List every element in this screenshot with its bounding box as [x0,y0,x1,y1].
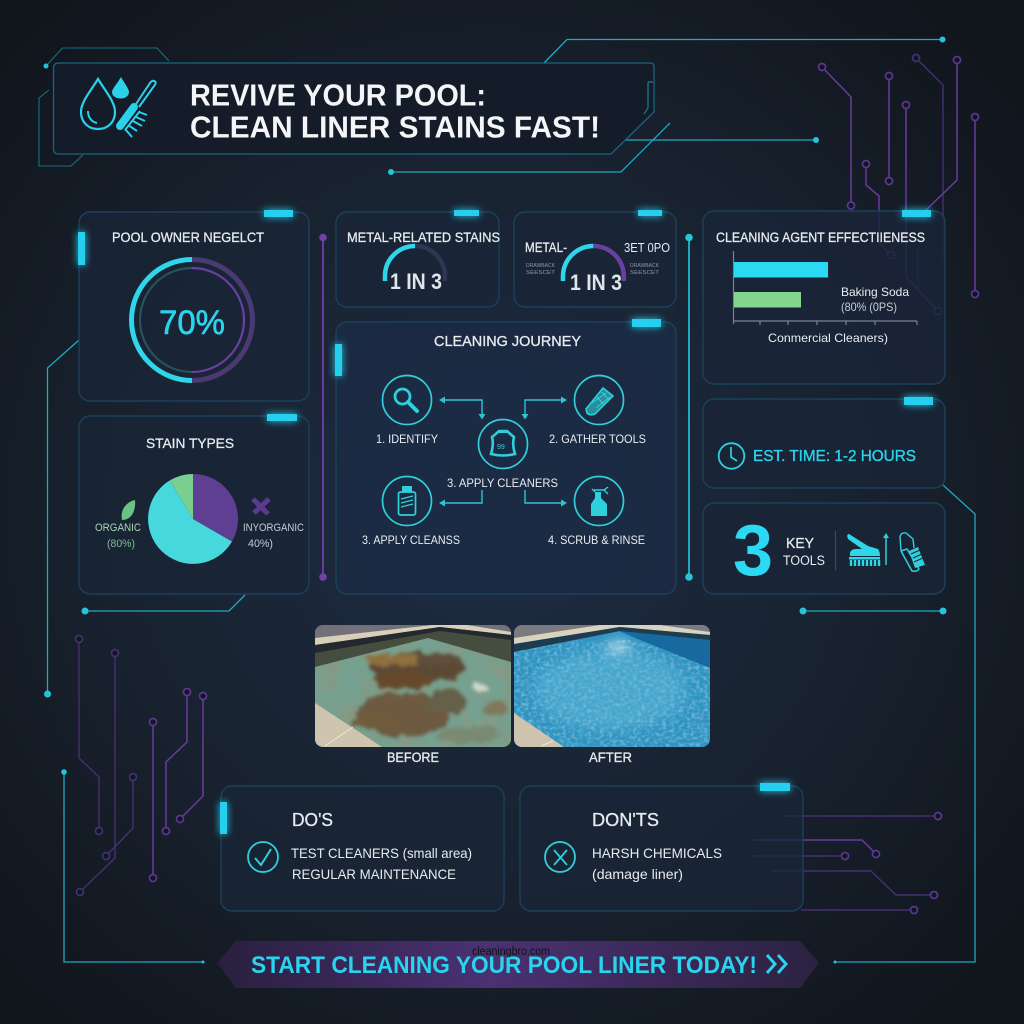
icon: check [248,842,278,872]
arrow: 1 to center [439,396,486,420]
panel: metal stat 2 [514,210,676,307]
step 1: identify [376,376,438,446]
label: organic [95,522,141,550]
heading: CLEANING AGENT EFFECTIIENESS [716,230,925,245]
small caption right: SEESCET [630,270,660,276]
watermark: cleaningbro.com [472,946,550,958]
label right: 3ET 0PO [624,240,670,255]
title: REVIVE YOUR POOL: [190,78,486,112]
circuit traces: purple lower left [76,636,206,896]
list [291,845,472,882]
panel: do's [220,786,504,911]
bar chart: Baking Soda [841,285,909,299]
heading: pool owner neglect: POOL OWNER NEGELCT [112,229,264,245]
label: inorganic: 40%) [248,538,273,550]
small caption right: DRAWBACK [630,263,659,269]
list [592,845,722,882]
heading: stain types: STAIN TYPES [146,435,234,451]
bar chart: Conmercial Cleaners) [768,331,888,345]
text: time: EST. TIME: 1-2 HOURS [753,448,916,465]
label: key tools: KEY [786,535,814,552]
chart: pie [148,474,238,564]
header banner [54,63,654,154]
label: organic: (80%) [107,538,135,550]
label: key tools: TOOLS [783,553,825,568]
label: inorganic [243,522,304,550]
small caption left: DRAWBACK [526,263,555,269]
photo: after [514,625,710,747]
step 3b: apply cleanss: 3. APPLY CLEANSS [362,533,460,547]
icon: arrow up [883,533,889,565]
circuit traces: purple lower right [748,812,942,914]
gauge: 1 IN 3 [570,270,622,295]
arrow: center to 4 [525,490,567,506]
panel: stain types [79,414,309,594]
bar chart [733,251,917,345]
list: REGULAR MAINTENANCE [292,866,456,882]
list: HARSH CHEMICALS [592,845,722,861]
small caption right [630,263,660,276]
call to action banner [217,941,819,988]
heading: METAL-RELATED STAINS [347,229,500,245]
call to action banner: START CLEANING YOUR POOL LINER TODAY! [251,952,757,979]
label: after: AFTER [589,750,632,765]
circuit traces: purple top right [818,54,978,314]
small caption left [526,263,556,276]
gauge [563,246,624,295]
step 4: scrub and rinse [548,476,645,547]
heading: CLEANING JOURNEY [434,334,581,350]
step 3: center cleaner: 99 [497,444,505,451]
icon: hand brush [900,533,925,571]
label: organic: ORGANIC [95,522,141,534]
step 1: identify: 1. IDENTIFY [376,432,438,446]
icon: chevrons [767,955,786,973]
icon: crossed tools [253,499,269,514]
stat: 3: 3 [733,511,773,591]
arrow: 2 to center [522,396,567,420]
panel: metal-related stains [336,210,500,307]
panel: cleaning agent effectiveness [703,210,945,384]
gauge [385,246,445,294]
arrow: center to 3 [439,490,482,506]
icon: leaf [122,500,135,520]
panel: cleaning journey [335,319,676,594]
step 3: center cleaner: 3. APPLY CLEANERS [447,476,558,490]
connector: purple [319,234,327,581]
icon: water drops and brush [81,77,156,137]
panel: pool owner neglect [78,210,309,401]
label: before: BEFORE [387,750,439,765]
small caption left: SEESCET [526,270,556,276]
label: key tools [783,535,825,568]
label: inorganic: INYORGANIC [243,522,304,534]
chart: 70% ring [131,260,252,380]
panel: key tools [703,503,945,594]
icon: cross [545,842,575,872]
label left: METAL- [525,240,567,255]
step 2: gather tools: 2. GATHER TOOLS [549,432,646,446]
list: TEST CLEANERS (small area) [291,845,472,861]
icon: clock [719,443,744,469]
title: CLEAN LINER STAINS FAST! [190,110,600,144]
heading: DON'TS [592,810,659,830]
gauge: 1 IN 3 [390,269,442,294]
connector: teal [685,234,693,581]
panel: estimated time [703,397,945,488]
bar chart: (80% (0PS) [841,300,897,314]
photo: before [315,625,511,747]
title [190,78,600,144]
panel: don'ts [520,783,803,911]
icon: scrub brush [847,534,880,566]
step 4: scrub and rinse: 4. SCRUB & RINSE [548,533,645,547]
heading: DO'S [292,810,333,830]
step 2: gather tools [549,376,646,446]
step 3: center cleaner [447,420,558,490]
chart: 70% ring: 70% [159,304,225,342]
step 3b: apply cleanss [362,476,460,547]
list: (damage liner) [592,866,683,882]
